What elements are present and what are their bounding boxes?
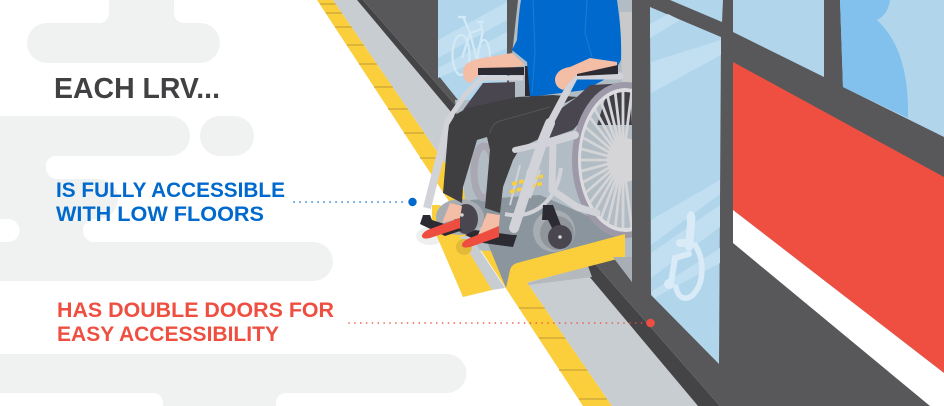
callout dot <box>646 319 655 327</box>
passenger in wheelchair <box>416 0 632 297</box>
shoe shadow <box>416 227 444 245</box>
armrest pads <box>478 65 618 76</box>
callout text: HAS DOUBLE DOORS FOR <box>57 298 334 322</box>
yellow boarding threshold <box>432 205 492 297</box>
arms <box>463 53 617 90</box>
grey platform surface <box>333 0 698 406</box>
main wheel spokes <box>581 88 632 228</box>
blue shirt <box>512 0 621 97</box>
left seat panel <box>463 82 515 110</box>
platform below door <box>613 257 632 282</box>
heading: EACH LRV... <box>54 73 220 105</box>
feet <box>442 203 500 235</box>
callout text <box>57 298 334 346</box>
yellow ramp plate <box>506 234 625 288</box>
callout leader <box>294 201 408 203</box>
door window with bicycle <box>438 0 507 130</box>
right side panel <box>543 83 630 138</box>
upper windows <box>670 0 944 137</box>
callout text <box>56 178 285 226</box>
left caster wheel <box>436 199 484 235</box>
ramp surface <box>470 195 625 288</box>
backrest post <box>525 66 531 96</box>
callout leader <box>349 322 645 324</box>
red body panel <box>733 62 944 373</box>
vehicle body <box>363 0 944 406</box>
tactile strip lines <box>320 4 607 399</box>
footrests <box>420 215 517 247</box>
main wheel rim <box>572 82 632 238</box>
yellow tactile strip <box>317 0 612 406</box>
callout: double doors <box>57 298 655 346</box>
icon: wheelchair symbol <box>664 211 702 298</box>
callout dot <box>408 198 417 206</box>
black trousers <box>443 95 577 213</box>
seated passenger silhouette <box>840 0 908 118</box>
red shoes <box>422 218 499 248</box>
ramp shadow <box>528 266 592 285</box>
callout text: EASY ACCESSIBILITY <box>57 322 279 346</box>
callout text: IS FULLY ACCESSIBLE <box>56 178 285 202</box>
front caster wheel <box>533 205 575 252</box>
dark platform edge <box>357 0 720 406</box>
seat back <box>620 12 632 83</box>
far side wheel <box>474 146 561 215</box>
left frame tube <box>427 78 523 208</box>
callout: low floors <box>56 178 417 226</box>
door opening interior <box>455 0 632 282</box>
background clouds <box>0 0 466 406</box>
trouser seam <box>490 107 550 133</box>
right frame tubes <box>514 76 620 228</box>
right door window <box>650 7 721 364</box>
shoe shadow on threshold <box>456 239 472 255</box>
white stripe <box>733 210 944 406</box>
callout text: WITH LOW FLOORS <box>56 202 264 226</box>
icon: bicycle <box>452 17 490 76</box>
threshold light strip <box>460 235 505 290</box>
platform <box>317 0 720 406</box>
